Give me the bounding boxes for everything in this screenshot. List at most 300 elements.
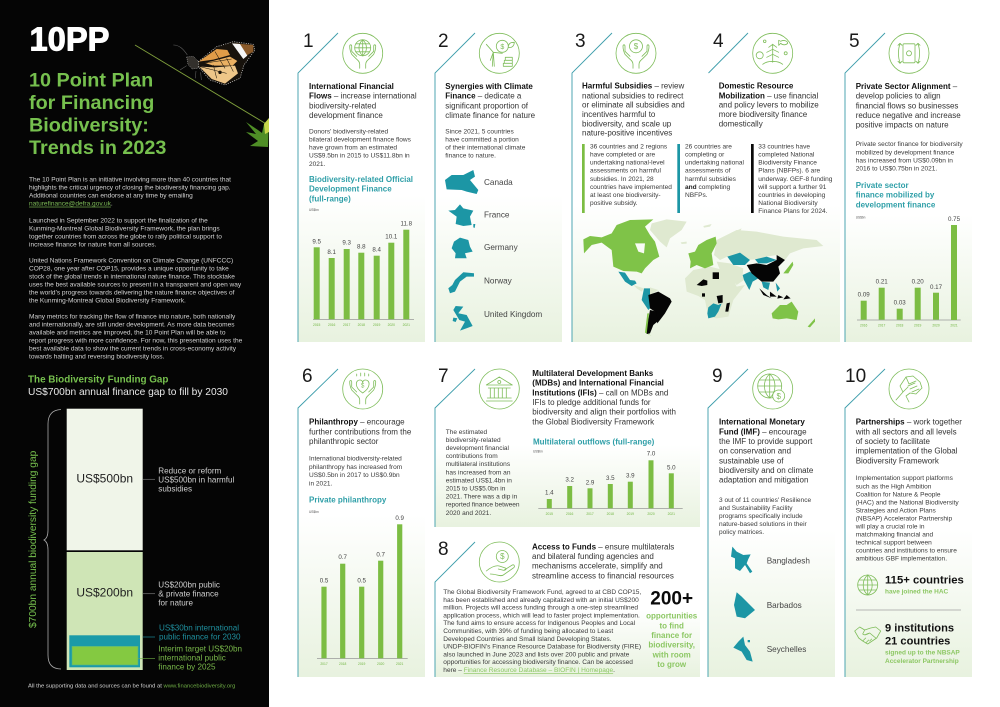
icon: coin in hands: $ bbox=[634, 42, 639, 51]
stat: institutions and countries bbox=[855, 623, 960, 665]
bar chart: 2017 bbox=[320, 662, 328, 666]
title: for Financing bbox=[29, 92, 154, 114]
heading: Finance bbox=[445, 92, 476, 101]
heading: – work together bbox=[905, 418, 962, 427]
number: 1 bbox=[303, 31, 314, 52]
chart title: Development Finance bbox=[309, 185, 392, 194]
heading: – increase international bbox=[332, 92, 417, 101]
heading: mechanisms accelerate, simplify and bbox=[532, 562, 663, 571]
text block: initiative intro: The 10 Point Plan is an initiative involving more than 40 countries that bbox=[29, 177, 231, 184]
bar chart: 0.7 bbox=[376, 552, 386, 559]
heading: financial flows so businesses bbox=[856, 101, 958, 110]
callout: interim target: international public bbox=[158, 654, 226, 663]
number: 7 bbox=[438, 366, 449, 387]
body text: The fund aims to ensure access for Indigenous Peoples and Local bbox=[443, 620, 636, 627]
icon: bank building bbox=[479, 369, 519, 409]
stat: 115+ countries bbox=[858, 574, 964, 595]
country: Bangladesh bbox=[731, 547, 810, 573]
heading: – use financial bbox=[765, 91, 819, 100]
body text: Finance Resource Database – BIOFIN | Homepage. bbox=[464, 667, 615, 674]
number: 8 bbox=[438, 539, 449, 560]
body text: Strategies and Action Plans bbox=[856, 507, 936, 514]
bar chart: 2.9 bbox=[586, 479, 595, 486]
body text: Communities, with 39% of funding being allocated to Least bbox=[443, 628, 613, 635]
bar chart: 0.5 bbox=[320, 578, 329, 585]
panel 6: philanthropy bbox=[298, 366, 425, 677]
body text: nature-based solutions in their bbox=[719, 521, 808, 528]
bar chart: 2016 bbox=[860, 324, 868, 328]
stat column: green bbox=[582, 144, 672, 213]
body text: matchmaking financial and bbox=[856, 532, 934, 539]
callout: interim target: Interim target US$20bn bbox=[158, 645, 242, 654]
callout: public private finance bbox=[143, 580, 220, 607]
callout: public private finance: for nature bbox=[158, 598, 193, 607]
bar chart: 2018 bbox=[339, 662, 347, 666]
body text: Since 2021, 5 countries bbox=[445, 128, 514, 135]
icon: heart in hands: $ bbox=[361, 384, 365, 390]
bar chart: 2017 bbox=[586, 512, 594, 516]
callout: 200+ opportunities: finance for bbox=[651, 631, 692, 640]
heading: develop policies to align bbox=[856, 92, 941, 101]
text block: launch: Kunming-Montreal Global Biodiversity Framework, the plan brings bbox=[29, 225, 220, 232]
bar chart: 3.9 bbox=[626, 472, 635, 479]
text block: COP28: COP28, one year after COP15, provides a unique opportunity to take bbox=[29, 265, 229, 272]
heading: – encourage bbox=[760, 427, 807, 436]
heading: incentives harmful to bbox=[582, 110, 656, 119]
panel 8: access to funds bbox=[435, 539, 700, 677]
body text: will play a crucial role in bbox=[855, 524, 925, 531]
bar chart: 0.5 bbox=[357, 578, 367, 585]
text block: metrics: Many metrics for tracking the flow of finance into nature, both nationally bbox=[29, 313, 236, 320]
stat column: green: have completed or are bbox=[590, 152, 656, 159]
stat column: teal: harmful subsidies bbox=[685, 176, 737, 183]
panel 10: partnerships bbox=[845, 366, 972, 677]
bar chart: 9.5 bbox=[312, 238, 322, 245]
body text: US$9.5bn in 2015 to US$11.8bn in bbox=[309, 153, 410, 160]
body text: and Sustainability Facility bbox=[719, 505, 793, 512]
stat column: black: will support a further 91 bbox=[757, 184, 827, 191]
callout: 200+ opportunities: biodiversity, bbox=[648, 641, 695, 650]
heading: funding gap bbox=[28, 375, 228, 398]
country: France: France bbox=[484, 211, 510, 220]
chart: funding gap stacked column: US$200bn bbox=[76, 586, 133, 600]
body text: biodiversity-related bbox=[446, 437, 501, 444]
heading: Synergies with Climate bbox=[445, 82, 533, 91]
heading: Biodiversity Framework bbox=[856, 456, 940, 465]
stat: institutions and countries: signed up to the NBSAP bbox=[885, 650, 960, 657]
body text: 3 out of 11 countries' Resilience bbox=[719, 497, 811, 504]
stat column: green: undertaking national-level bbox=[590, 160, 665, 167]
bar chart: 2020 bbox=[932, 324, 940, 328]
body text: International biodiversity-related bbox=[309, 456, 402, 463]
stat: institutions and countries: Accelerator Partnership bbox=[885, 658, 959, 665]
country: Norway: Norway bbox=[484, 277, 513, 286]
bar chart: 3.5 bbox=[606, 475, 615, 482]
bar chart: 2019 bbox=[627, 512, 634, 516]
heading: development finance bbox=[309, 111, 383, 120]
number: 5 bbox=[849, 31, 860, 52]
bar chart: 5.0 bbox=[667, 464, 676, 471]
body text: have committed a portion bbox=[445, 136, 519, 144]
bar chart: 0.17 bbox=[930, 284, 943, 291]
body text: US$0.5bn in 2017 to US$0.9bn bbox=[309, 472, 400, 479]
stat: 115+ countries: 115+ countries bbox=[885, 574, 964, 586]
heading: further contributions from the bbox=[309, 427, 412, 436]
body text: multilateral institutions bbox=[446, 461, 511, 468]
country: United Kingdom bbox=[453, 306, 542, 331]
body text: (NBSAP) Accelerator Partnership bbox=[856, 515, 952, 522]
heading: significant proportion of bbox=[445, 101, 529, 110]
callout: public private finance: & private finance bbox=[158, 589, 219, 598]
stat column: teal: assessments of bbox=[685, 168, 731, 175]
chart: funding gap stacked column: US$500bn bbox=[76, 472, 133, 486]
number: 4 bbox=[713, 31, 724, 52]
chart title: development finance bbox=[856, 200, 936, 209]
callout: 200+ opportunities: with room bbox=[652, 650, 691, 659]
heading: the Global Biodiversity Framework bbox=[532, 417, 655, 426]
bar chart: 2021 bbox=[950, 324, 958, 328]
icon: plant, fish and coin bbox=[753, 33, 793, 73]
callout: international public finance bbox=[143, 624, 241, 642]
stat column: green: assessments on harmful bbox=[590, 168, 661, 175]
heading: Private Sector Alignment bbox=[856, 82, 951, 91]
stat column: green: subsidies. In 2021, 28 bbox=[590, 176, 654, 183]
country: Seychelles bbox=[733, 637, 806, 662]
title: Trends in 2023 bbox=[29, 137, 166, 159]
stat column: teal: NBFPs. bbox=[685, 192, 708, 199]
panel 5: private sector alignment bbox=[845, 31, 972, 342]
bar chart: 0.20 bbox=[912, 279, 924, 286]
body text: programs specifically include bbox=[719, 513, 803, 520]
heading: streamline access to financial resources bbox=[532, 571, 674, 580]
heading: more biodiversity finance bbox=[719, 110, 808, 119]
bar chart: 2017 bbox=[878, 324, 886, 328]
callout: 200+ opportunities bbox=[646, 589, 698, 669]
body text: Coalition for Nature & People bbox=[856, 491, 941, 498]
heading: – bbox=[951, 82, 958, 91]
panel: left introduction sidebar bbox=[0, 0, 269, 707]
bar chart: 2020 bbox=[647, 512, 655, 516]
stat column: teal: 26 countries are bbox=[685, 144, 732, 151]
country: Seychelles: Seychelles bbox=[767, 645, 806, 654]
bar chart: 0.9 bbox=[395, 515, 405, 522]
country: Barbados bbox=[734, 592, 802, 618]
heading: Institutions (IFIs) bbox=[532, 388, 597, 397]
body text: policy matrices. bbox=[719, 529, 764, 536]
heading: – encourage bbox=[358, 418, 405, 427]
country: Barbados: Barbados bbox=[767, 601, 802, 610]
body text: philanthropy has increased from bbox=[309, 464, 403, 471]
axis label: $700bn annual biodiversity funding gap bbox=[28, 450, 39, 628]
icon: coin over open hand bbox=[479, 542, 519, 582]
heading: and policy levers to mobilize bbox=[719, 101, 819, 110]
heading: the IMF to provide support bbox=[719, 437, 813, 446]
heading: – review bbox=[652, 82, 684, 91]
heading: biodiversity, and scale up bbox=[582, 119, 672, 128]
stat column: teal: completing bbox=[697, 184, 730, 191]
chart title: Private sector bbox=[856, 181, 909, 190]
stat column: black: National Biodiversity bbox=[758, 200, 818, 207]
heading: Fund (IMF) bbox=[719, 427, 760, 436]
body text: also launched in June 2023 and lists over 200 public and private bbox=[443, 651, 630, 658]
callout: harmful subsidies: subsidies bbox=[158, 485, 192, 494]
bar chart: 8.1 bbox=[327, 249, 337, 256]
text block: metrics: towards halting and reversing biodiversity loss. bbox=[29, 354, 165, 360]
number: 3 bbox=[575, 31, 586, 52]
bar chart: 2015 bbox=[546, 512, 553, 516]
stat column: black: Finance Plans for 2024. bbox=[758, 208, 828, 215]
body text: 2016 to US$0.75bn in 2021. bbox=[856, 166, 937, 173]
bar chart bbox=[309, 208, 414, 327]
icon: globe in hands bbox=[343, 33, 383, 73]
stat column: teal: undertaking national bbox=[685, 160, 745, 167]
heading: of society to facilitate bbox=[856, 437, 931, 446]
body text: application process, which will lead to faster project implementation. bbox=[443, 612, 640, 619]
heading: implementation of the Global bbox=[856, 447, 958, 456]
heading: Flows bbox=[309, 92, 332, 101]
body text: million. Projects will access funding through a one-step streamlined bbox=[443, 605, 638, 612]
callout: harmful subsidies: US$500bn in harmful bbox=[158, 476, 235, 485]
body text: opportunities for accessing biodiversity finance. Can be accessed bbox=[443, 659, 633, 666]
chart title: Private philanthropy bbox=[309, 496, 387, 505]
body text: has increased from US$0.09bn in bbox=[856, 157, 953, 164]
bar chart: US$bn bbox=[309, 510, 319, 514]
bar chart: 0.7 bbox=[338, 554, 348, 561]
text block: metrics: and internationally, are still under development. As more data becomes bbox=[29, 321, 235, 328]
stat column: teal: and bbox=[685, 184, 697, 191]
body text: 2021. bbox=[309, 161, 326, 168]
number: 6 bbox=[302, 366, 313, 387]
icon: document with arrows bbox=[889, 33, 929, 73]
heading: Access to Funds bbox=[532, 542, 597, 551]
callout: interim target bbox=[138, 645, 242, 672]
body text: Implementation support platforms bbox=[856, 475, 954, 482]
chart title: Multilateral outflows (full-range) bbox=[533, 437, 655, 446]
icon: clasped hands bbox=[889, 369, 929, 409]
panel 3: harmful subsidies bbox=[572, 31, 840, 342]
heading: International Financial bbox=[309, 82, 394, 91]
country: France bbox=[448, 204, 510, 228]
chart: funding gap stacked column bbox=[67, 409, 143, 670]
text block: COP28: stock of the global trends in international nature finance. This stocktake bbox=[29, 274, 235, 280]
stat column: teal: completing or bbox=[685, 152, 725, 159]
stat: institutions and countries: 21 countries bbox=[885, 635, 950, 647]
body text: here – bbox=[443, 667, 464, 674]
stat column: black: countries in developing bbox=[758, 192, 826, 199]
bar chart: 2016 bbox=[566, 512, 574, 516]
panel 2: synergies with climate finance bbox=[435, 31, 562, 342]
bar chart: 2015 bbox=[313, 323, 321, 327]
chart title: Biodiversity-related Official bbox=[309, 175, 413, 184]
heading: funding gap: The Biodiversity Funding Gap bbox=[28, 375, 168, 386]
country: United Kingdom: United Kingdom bbox=[484, 310, 542, 319]
body text: (HAC) and the National Biodiversity bbox=[856, 499, 959, 506]
heading: Mobilization bbox=[719, 91, 765, 100]
heading: sustainable use of bbox=[719, 456, 784, 465]
body text: finance to nature. bbox=[445, 153, 496, 160]
body text: UNDP-BIOFIN's Finance Resource Database for Biodiversity (FIRE) bbox=[443, 644, 641, 651]
country: Bangladesh: Bangladesh bbox=[767, 557, 810, 566]
body text: countries and institutions to ensure bbox=[856, 548, 957, 555]
stat column: black: 33 countries have bbox=[758, 144, 810, 151]
text block: COP28: the world's progress towards delivering the nature finance objectives of bbox=[29, 290, 235, 296]
stat column: black bbox=[751, 144, 833, 215]
chart title: (full-range) bbox=[309, 195, 351, 204]
text block: COP28: United Nations Framework Convention on Climate Change (UNFCCC) bbox=[29, 257, 233, 264]
callout: international public finance: US$30bn international bbox=[159, 624, 239, 633]
heading: Domestic Resource bbox=[719, 82, 794, 91]
text block: metrics: best available data to show the current trends in cross-economy activity bbox=[29, 346, 237, 352]
bar chart: 2018 bbox=[896, 324, 904, 328]
heading: Philanthropy bbox=[309, 418, 358, 427]
body text: has increased from an bbox=[446, 469, 511, 476]
bar chart bbox=[533, 450, 683, 516]
body text: bilateral development finance flows bbox=[309, 136, 412, 144]
body text: in 2021. bbox=[309, 480, 332, 487]
bar chart: US$bn bbox=[533, 450, 543, 454]
heading: and bilateral funding agencies and bbox=[532, 552, 654, 561]
bar chart: 0.09 bbox=[858, 292, 870, 299]
text block: initiative intro: . bbox=[111, 201, 113, 208]
stat column: green: at least one biodiversity- bbox=[590, 192, 661, 199]
bar chart: 3.2 bbox=[565, 477, 575, 484]
body text: ambitious GBF implementation. bbox=[856, 556, 947, 563]
body text: contributions from bbox=[446, 453, 498, 460]
heading: positive impacts on nature bbox=[856, 120, 949, 130]
bar chart bbox=[856, 216, 961, 328]
stat column: teal bbox=[677, 144, 745, 213]
number: 2 bbox=[438, 31, 449, 52]
icon: globe and coin: $ bbox=[776, 392, 781, 401]
stat column: green: positive subsidy. bbox=[590, 200, 638, 207]
logo: 10PP: 10PP bbox=[30, 22, 110, 58]
icon: heart in hands bbox=[343, 369, 383, 409]
heading: climate finance for nature bbox=[445, 111, 536, 120]
heading: – dedicate a bbox=[476, 92, 522, 101]
bar chart: 2018 bbox=[607, 512, 614, 516]
body text: of their international climate bbox=[445, 145, 526, 152]
text block: initiative intro: highlights the critical urgency of closing the biodiversity financing gap. bbox=[29, 185, 231, 192]
world map bbox=[583, 219, 823, 336]
bar chart: 2021 bbox=[396, 662, 404, 666]
heading: (MDBs) and International Financial bbox=[532, 379, 664, 388]
bar chart: US$bn bbox=[309, 208, 319, 212]
stat column: black: Biodiversity Finance bbox=[758, 160, 817, 167]
text block: metrics: report progress with more confidence. For now, this presentation uses the bbox=[29, 338, 243, 344]
bar chart: 0.03 bbox=[894, 300, 906, 307]
heading: Harmful Subsidies bbox=[582, 82, 653, 91]
text block: launch: together countries from across the globe to rally political support to bbox=[29, 233, 222, 240]
bar chart: 8.8 bbox=[357, 244, 366, 251]
bar chart: 2021 bbox=[668, 512, 675, 516]
bar chart: 2019 bbox=[373, 323, 381, 327]
body text: has been established and already capitalized with an initial US$200 bbox=[443, 597, 639, 604]
icon: wind turbine and coins bbox=[479, 33, 519, 73]
callout: international public finance: public finance for 2030 bbox=[159, 633, 241, 642]
callout: 200+ opportunities: 200+ bbox=[650, 589, 693, 610]
bar chart: 0.21 bbox=[876, 279, 888, 286]
bar chart: 1.4 bbox=[545, 490, 554, 497]
stat column: black: Plans (NBFPs). 6 are bbox=[758, 168, 821, 175]
bar chart: 2018 bbox=[358, 323, 365, 327]
number: 9 bbox=[712, 366, 723, 387]
icon: wind turbine and coins: $ bbox=[500, 44, 504, 51]
body text: technical support between bbox=[856, 540, 932, 547]
icon: coin over open hand: $ bbox=[500, 552, 505, 561]
icon: globe and coin bbox=[753, 369, 793, 409]
heading: on conservation and bbox=[719, 447, 791, 456]
stat column: green: countries have implemented bbox=[590, 184, 672, 191]
stat: 115+ countries: have joined the HAC bbox=[885, 588, 949, 595]
text block: COP28: uses the best available sources to present in a transparent and open way bbox=[29, 282, 242, 288]
icon: coin in hands bbox=[616, 33, 656, 73]
country: Germany: Germany bbox=[484, 243, 519, 252]
body text: The Global Biodiversity Framework Fund, agreed to at CBD COP15, bbox=[443, 589, 641, 596]
body text: 2015 to US$5.0bn in bbox=[446, 485, 506, 492]
callout: public private finance: US$200bn public bbox=[158, 580, 220, 589]
stat: institutions and countries: 9 institutions bbox=[885, 623, 954, 635]
text block: launch: Launched in September 2022 to support the finalization of the bbox=[29, 217, 208, 224]
heading: nature-positive incentives bbox=[582, 129, 672, 138]
body text: reported finance between bbox=[446, 502, 520, 509]
body text: The estimated bbox=[446, 429, 488, 436]
heading: with all sectors and all levels bbox=[855, 427, 957, 436]
country: Germany bbox=[452, 238, 519, 258]
body text: mobilized by development finance bbox=[856, 149, 955, 156]
country: Canada bbox=[445, 170, 513, 194]
number: 10 bbox=[845, 366, 866, 387]
chart title: finance mobilized by bbox=[856, 191, 935, 200]
bar chart: 2016 bbox=[328, 323, 336, 327]
bar chart: 2020 bbox=[388, 323, 395, 327]
body text: 2021. There was a dip in bbox=[446, 493, 518, 500]
bar chart: 2017 bbox=[343, 323, 351, 327]
heading: biodiversity and align their portfolios with bbox=[532, 408, 676, 417]
bar chart: 11.8 bbox=[401, 221, 413, 228]
bar chart: 2021 bbox=[403, 323, 410, 327]
heading: International Monetary bbox=[719, 418, 805, 427]
body text: 2020 and 2021. bbox=[446, 510, 491, 517]
heading: IFIs to pledge additional funds for bbox=[532, 398, 651, 407]
heading: or eliminate all subsidies and bbox=[582, 101, 685, 110]
body text: Private sector finance for biodiversity bbox=[856, 141, 963, 148]
heading: funding gap: US$700bn annual finance gap to fill by 2030 bbox=[28, 387, 228, 398]
callout: 200+ opportunities: to grow bbox=[657, 660, 687, 669]
bar chart: 9.3 bbox=[342, 240, 352, 247]
text block: metrics: available and metrics are improved, the 10 Point Plan will be able to bbox=[29, 330, 226, 336]
panel 1: international financial flows bbox=[298, 31, 425, 342]
heading: reduce negative and increase bbox=[856, 111, 961, 120]
text block: initiative intro: naturefinance@defra.gov.uk bbox=[29, 201, 112, 208]
bar chart: 10.1 bbox=[385, 234, 398, 241]
illustration: butterfly on grass stem bbox=[135, 42, 269, 147]
body text: such as the High Ambition bbox=[856, 483, 932, 490]
heading: national subsidies to redirect bbox=[582, 91, 684, 100]
bar chart: 2019 bbox=[358, 662, 366, 666]
callout: interim target: finance by 2025 bbox=[158, 663, 216, 672]
brace bbox=[44, 410, 61, 669]
text block: COP28: the Kunming-Montreal Global Biodiversity Framework. bbox=[29, 298, 186, 304]
heading: Partnerships bbox=[856, 418, 905, 427]
country: Canada: Canada bbox=[484, 178, 513, 187]
body text: development financial bbox=[446, 445, 510, 452]
bar chart: US$bn bbox=[856, 216, 866, 220]
bar chart: 2020 bbox=[377, 662, 385, 666]
bar chart: 7.0 bbox=[647, 451, 656, 458]
panel 4: domestic resource mobilization bbox=[708, 31, 833, 215]
heading: domestically bbox=[719, 119, 763, 128]
panel 7: MDBs and IFIs bbox=[435, 366, 700, 527]
